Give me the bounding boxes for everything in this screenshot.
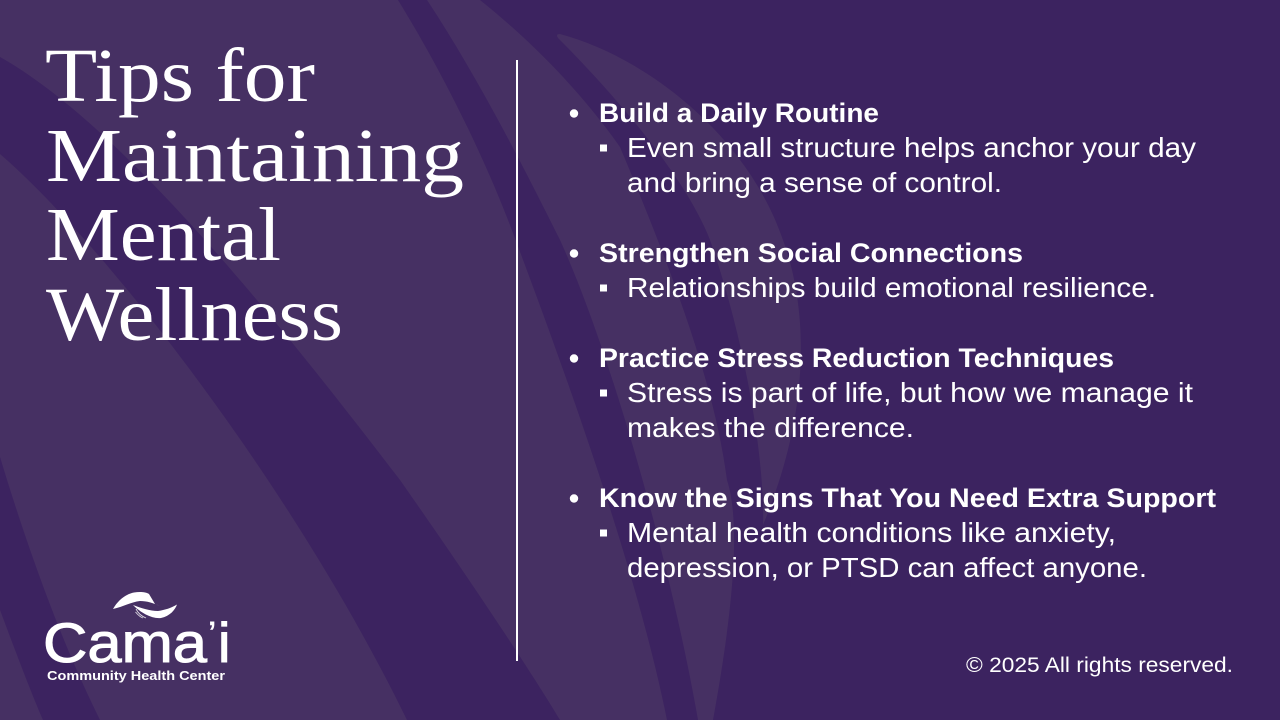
logo: Cama'i Community Health Center [43, 592, 230, 683]
logo letter i: i [218, 611, 230, 674]
tip 1: build a daily routine: Even small structure helps anchor your day [627, 132, 1196, 163]
tip 3: practice stress reduction techniques: Practice Stress Reduction Techniques [599, 343, 1114, 373]
logo wordmark: Cama [43, 611, 208, 674]
tip 3: practice stress reduction techniques: Stress is part of life, but how we manage it [627, 377, 1193, 408]
icon: logo emblem [113, 592, 177, 618]
tip 4: know the signs [570, 483, 1216, 583]
tip 4: know the signs: Know the Signs That You Need Extra Support [599, 483, 1216, 513]
title [45, 34, 464, 357]
tip 4: know the signs: depression, or PTSD can affect anyone. [627, 552, 1147, 583]
tip 4: know the signs: Mental health conditions like anxiety, [627, 517, 1116, 548]
tip 1: build a daily routine [570, 98, 1196, 198]
tip 1: build a daily routine: and bring a sense of control. [627, 167, 1002, 198]
tip 1: build a daily routine: Build a Daily Routine [599, 98, 879, 128]
logo apostrophe: ’ [208, 616, 216, 649]
title: Maintaining [46, 114, 464, 198]
title: Wellness [46, 273, 343, 357]
tip 2: strengthen social connections [570, 238, 1156, 303]
tip 3: practice stress reduction techniques: makes the difference. [627, 412, 914, 443]
vertical divider [516, 60, 518, 661]
logo tagline: Community Health Center [47, 668, 225, 683]
copyright: © 2025 All rights reserved. [966, 654, 1233, 677]
tips list [570, 98, 1216, 583]
title: Tips for [45, 34, 315, 118]
tip 2: strengthen social connections: Relationships build emotional resilience. [627, 272, 1156, 303]
title: Mental [46, 193, 281, 277]
tip 2: strengthen social connections: Strengthen Social Connections [599, 238, 1023, 268]
tip 3: practice stress reduction techniques [570, 343, 1193, 443]
